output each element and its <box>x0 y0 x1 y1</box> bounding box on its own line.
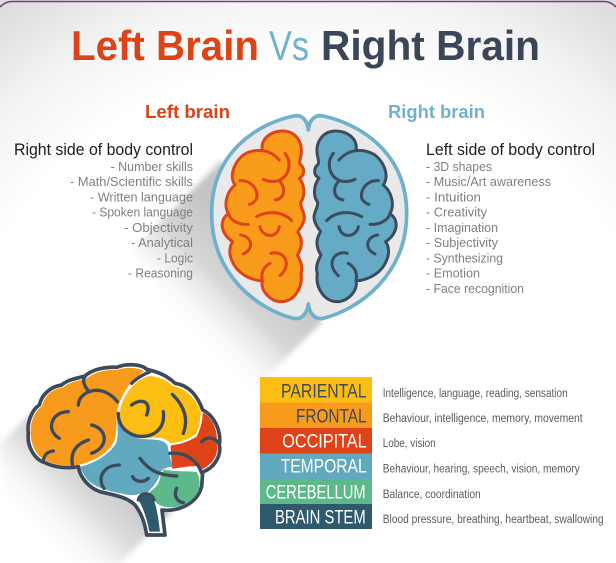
text block: right brain skills: - Intuition <box>426 190 481 204</box>
folds <box>43 372 219 503</box>
title <box>71 22 540 69</box>
lobe: cerebellum <box>149 469 200 507</box>
text block: right brain skills: - 3D shapes <box>426 160 492 174</box>
text block: left brain skills: - Reasoning <box>128 266 193 280</box>
text block: left brain skills: - Math/Scientific skills <box>70 175 193 189</box>
text block: right brain skills: - Music/Art awareness <box>426 175 551 189</box>
row: brain stem: BRAIN STEM <box>275 506 366 528</box>
title: Vs <box>269 22 309 69</box>
lobe: parietal <box>120 376 201 443</box>
lobe: temporal <box>80 417 173 495</box>
text block: left brain skills <box>14 140 194 280</box>
text block: right brain skills: - Synthesizing <box>426 252 503 266</box>
brain stem <box>138 495 160 532</box>
text block: left brain skills: - Analytical <box>131 236 193 250</box>
title: Left Brain <box>71 22 259 69</box>
row: frontal <box>260 402 583 428</box>
text block: left brain skills: - Written language <box>90 190 193 204</box>
legend: brain regions <box>260 377 604 529</box>
row: parietal: PARIENTAL <box>281 380 367 402</box>
row: temporal: TEMPORAL <box>281 456 367 478</box>
row: frontal: FRONTAL <box>296 406 367 428</box>
text block: left brain skills: - Number skills <box>110 160 193 174</box>
text block: right brain skills: - Creativity <box>426 206 488 220</box>
brain silhouette <box>28 365 220 535</box>
text block: left brain skills: - Objectivity <box>124 221 194 235</box>
title: Right Brain <box>321 22 540 69</box>
row: cerebellum: Balance, coordination <box>383 489 481 501</box>
text block: left brain skills: - Logic <box>157 252 193 266</box>
head outline <box>212 116 407 319</box>
row: brain stem <box>260 504 604 529</box>
lobe: occipital <box>171 413 217 469</box>
text block: right brain skills: - Emotion <box>426 266 480 280</box>
row: occipital <box>260 428 436 454</box>
icon: side view brain with coloured lobes <box>28 365 220 535</box>
text block: left brain skills: - Spoken language <box>92 206 193 220</box>
text block: right brain skills: - Face recognition <box>426 282 524 296</box>
left hemisphere <box>222 131 304 302</box>
shadow: side brain <box>0 408 172 563</box>
row: occipital: OCCIPITAL <box>282 430 367 452</box>
row: parietal: Intelligence, language, reading, sensation <box>383 388 568 400</box>
row: occipital: Lobe, vision <box>383 438 436 450</box>
text block: right brain skills: Left side of body control <box>426 140 595 159</box>
row: parietal <box>260 377 568 402</box>
icon: top view brain with two hemispheres <box>212 116 407 319</box>
text block: left brain skills: Right side of body control <box>14 140 193 159</box>
text block: right brain skills <box>426 140 595 296</box>
text block: right brain skills: - Imagination <box>426 221 498 235</box>
heading: left brain: Left brain <box>145 101 230 122</box>
row: cerebellum: CEREBELLUM <box>266 481 366 503</box>
row: frontal: Behaviour, intelligence, memory, movement <box>383 413 583 425</box>
text block: right brain skills: - Subjectivity <box>426 236 499 250</box>
heading: right brain: Right brain <box>388 101 485 122</box>
row: temporal: Behaviour, hearing, speech, vision, memory <box>383 464 580 476</box>
right hemisphere <box>314 131 396 302</box>
lobe: frontal <box>31 368 144 466</box>
shadow: top brain <box>132 160 322 412</box>
row: temporal <box>260 454 580 479</box>
row: cerebellum <box>260 479 481 504</box>
